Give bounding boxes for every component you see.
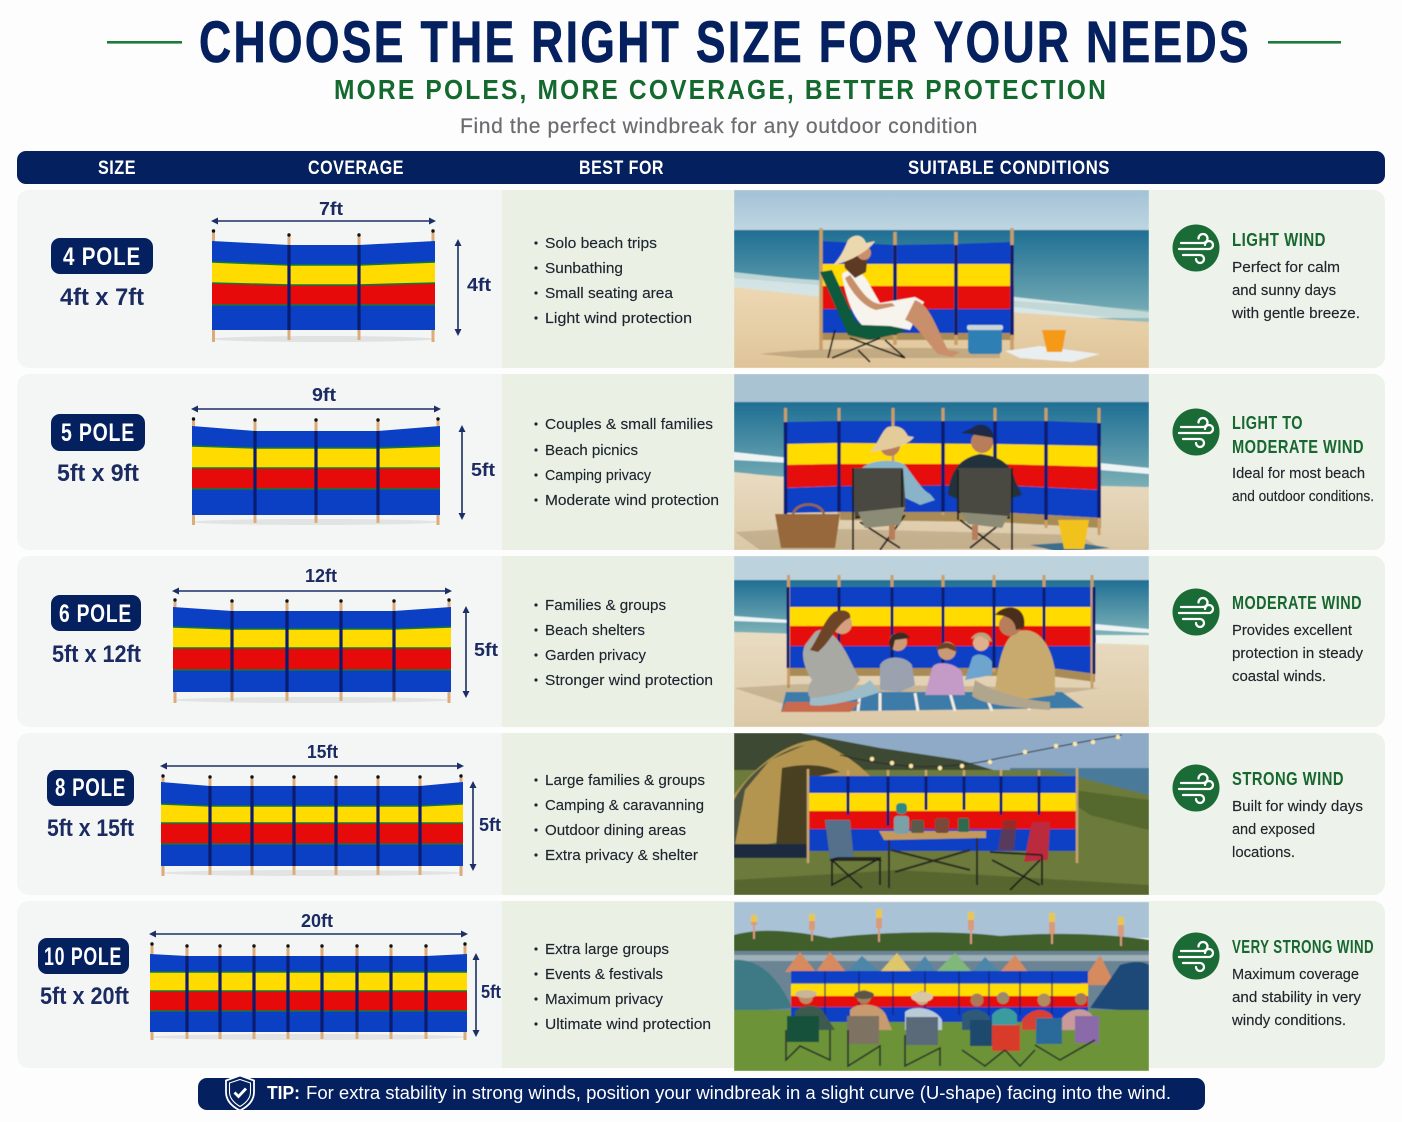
size badge: 5 POLE — [61, 419, 135, 447]
width arrow: 15ft — [307, 742, 338, 762]
flags — [750, 917, 1124, 947]
width arrow: 7ft — [319, 199, 343, 219]
pots — [894, 816, 909, 834]
windbreak — [791, 971, 1088, 983]
condition text — [1232, 465, 1374, 505]
condition text — [1232, 798, 1363, 861]
best for list: Camping privacy — [545, 467, 651, 484]
panel: 6 pole row — [17, 556, 1385, 727]
best for list: Couples & small families — [545, 416, 713, 433]
size dimensions: 4ft x 7ft — [60, 284, 144, 311]
icon: shield check — [226, 1076, 254, 1110]
size dimensions: 5ft x 12ft — [52, 641, 141, 668]
man — [948, 454, 1022, 500]
tagline: Find the perfect windbreak for any outdoor condition — [460, 115, 978, 138]
photo: woman on beach — [734, 190, 1149, 368]
windbreak diagram — [150, 944, 467, 1040]
condition text: with gentle breeze. — [1231, 305, 1360, 322]
windbreak diagram — [211, 231, 435, 342]
child two — [925, 663, 965, 695]
condition text: and sunny days — [1232, 282, 1336, 299]
panel: 8 pole row — [17, 733, 1385, 895]
best for list: Beach shelters — [545, 622, 645, 639]
wind panel — [1172, 408, 1374, 505]
wind panel — [1172, 224, 1360, 322]
condition text: locations. — [1232, 844, 1295, 861]
chair — [820, 270, 905, 340]
condition text: windy conditions. — [1231, 1012, 1346, 1029]
best for list: Sunbathing — [545, 260, 623, 277]
best for list: Large families & groups — [545, 772, 705, 789]
size dimensions: 5ft x 15ft — [47, 815, 134, 842]
best for list: Light wind protection — [545, 310, 692, 327]
best for list: Families & groups — [545, 597, 666, 614]
table header bar — [17, 151, 1385, 184]
best for list — [534, 772, 705, 864]
table header bar: BEST FOR — [579, 158, 664, 179]
best for list — [534, 941, 711, 1033]
subtitle: MORE POLES, MORE COVERAGE, BETTER PROTECTION — [334, 74, 1108, 105]
condition text: and outdoor conditions. — [1232, 488, 1374, 505]
size dimensions: 5ft x 9ft — [57, 460, 139, 487]
icon: wind — [1172, 932, 1220, 980]
width arrow — [211, 199, 436, 224]
size badge — [51, 414, 145, 451]
table — [879, 831, 986, 840]
width arrow — [160, 742, 464, 770]
best for list: Garden privacy — [545, 647, 646, 664]
woman — [862, 461, 935, 505]
best for list: Solo beach trips — [545, 235, 657, 252]
condition title: LIGHT WIND — [1232, 230, 1326, 250]
condition text: and stability in very — [1232, 989, 1362, 1006]
icon: wind — [1172, 588, 1220, 636]
windbreak diagram — [161, 776, 463, 876]
condition title: MODERATE WIND — [1232, 437, 1364, 457]
picnic blanket — [781, 692, 1084, 712]
bucket — [1042, 330, 1066, 352]
photo: family on beach — [734, 556, 1149, 727]
height arrow — [454, 239, 491, 336]
height arrow: 4ft — [467, 275, 491, 295]
spectators — [786, 990, 1099, 1066]
condition text: protection in steady — [1232, 645, 1364, 662]
width arrow — [191, 385, 441, 412]
condition text — [1232, 622, 1364, 685]
best for list: Outdoor dining areas — [545, 822, 686, 839]
string lights — [840, 735, 1122, 767]
condition text: Ideal for most beach — [1232, 465, 1365, 482]
height arrow: 5ft — [479, 815, 501, 835]
condition title: STRONG WIND — [1232, 769, 1344, 789]
table header bar: SIZE — [98, 158, 136, 179]
width arrow: 20ft — [301, 911, 333, 931]
best for list: Maximum privacy — [545, 991, 664, 1008]
height arrow: 5ft — [481, 982, 501, 1002]
title block — [107, 10, 1341, 138]
right chair — [1024, 822, 1050, 862]
condition text: Perfect for calm — [1232, 259, 1340, 276]
condition text — [1231, 966, 1362, 1029]
photo: festival campsite — [734, 902, 1149, 1071]
condition title — [1232, 413, 1364, 457]
title rule left — [107, 41, 182, 44]
photo: camping dining — [734, 733, 1149, 895]
size badge — [51, 238, 153, 274]
tip bar — [198, 1076, 1205, 1110]
condition text: Provides excellent — [1232, 622, 1353, 639]
left chair — [825, 820, 854, 860]
icon: wind — [1172, 764, 1220, 812]
best for list: Stronger wind protection — [545, 672, 713, 689]
tip text: For extra stability in strong winds, position your windbreak in a slight curve (U-shape) facing into the wind. — [306, 1083, 1171, 1103]
best for list: Extra privacy & shelter — [545, 847, 698, 864]
size badge: 8 POLE — [55, 774, 126, 802]
size badge: 10 POLE — [44, 943, 122, 971]
woman — [842, 271, 924, 330]
chairs — [852, 468, 906, 518]
size dimensions: 5ft x 20ft — [40, 983, 129, 1010]
bucket and towel — [1030, 542, 1110, 550]
width arrow — [172, 566, 452, 594]
height arrow: 5ft — [474, 640, 498, 660]
woman — [803, 630, 860, 700]
height arrow — [472, 953, 501, 1037]
condition text: Built for windy days — [1232, 798, 1363, 815]
best for list — [534, 597, 713, 689]
panel: 5 pole row — [17, 374, 1385, 552]
width arrow — [149, 911, 468, 938]
size badge — [51, 595, 141, 631]
height arrow: 5ft — [471, 460, 495, 480]
size badge — [47, 770, 134, 806]
man — [995, 630, 1055, 700]
panel: 10 pole row — [17, 901, 1385, 1071]
basket — [775, 514, 840, 548]
cooler — [968, 327, 1002, 354]
condition title: LIGHT TO — [1232, 413, 1303, 433]
height arrow — [458, 425, 495, 520]
windbreak diagram — [192, 419, 440, 525]
width arrow: 9ft — [312, 385, 336, 405]
windbreak diagram — [173, 600, 451, 703]
height arrow — [470, 781, 501, 871]
condition title: MODERATE WIND — [1232, 593, 1362, 613]
best for list — [534, 416, 719, 509]
best for list — [534, 235, 692, 327]
photo: couple on beach — [734, 374, 1149, 552]
child one — [880, 658, 915, 692]
width arrow: 12ft — [305, 566, 337, 586]
best for list: Camping & caravanning — [545, 797, 704, 814]
size badge — [38, 938, 129, 974]
size badge: 6 POLE — [59, 600, 132, 628]
condition text: coastal winds. — [1232, 668, 1326, 685]
best for list: Ultimate wind protection — [545, 1016, 711, 1033]
best for list: Extra large groups — [545, 941, 669, 958]
icon: wind — [1172, 408, 1220, 456]
condition text — [1231, 259, 1360, 322]
best for list: Moderate wind protection — [545, 492, 719, 509]
panel: 4 pole row — [17, 190, 1385, 368]
table header bar: COVERAGE — [308, 158, 404, 179]
condition text: Maximum coverage — [1232, 966, 1359, 983]
best for list: Beach picnics — [545, 442, 638, 459]
wind panel — [1172, 764, 1363, 861]
height arrow — [462, 606, 498, 698]
wind panel — [1172, 932, 1374, 1029]
best for list: Events & festivals — [545, 966, 663, 983]
tent — [734, 740, 872, 850]
tip text: TIP: — [267, 1083, 300, 1103]
size badge: 4 POLE — [63, 243, 141, 271]
table header bar: SUITABLE CONDITIONS — [908, 158, 1110, 179]
wind panel — [1172, 588, 1364, 685]
child three — [965, 655, 992, 680]
title rule right — [1268, 41, 1341, 44]
condition text: and exposed — [1232, 821, 1315, 838]
icon: wind — [1172, 224, 1220, 272]
best for list: Small seating area — [545, 285, 674, 302]
